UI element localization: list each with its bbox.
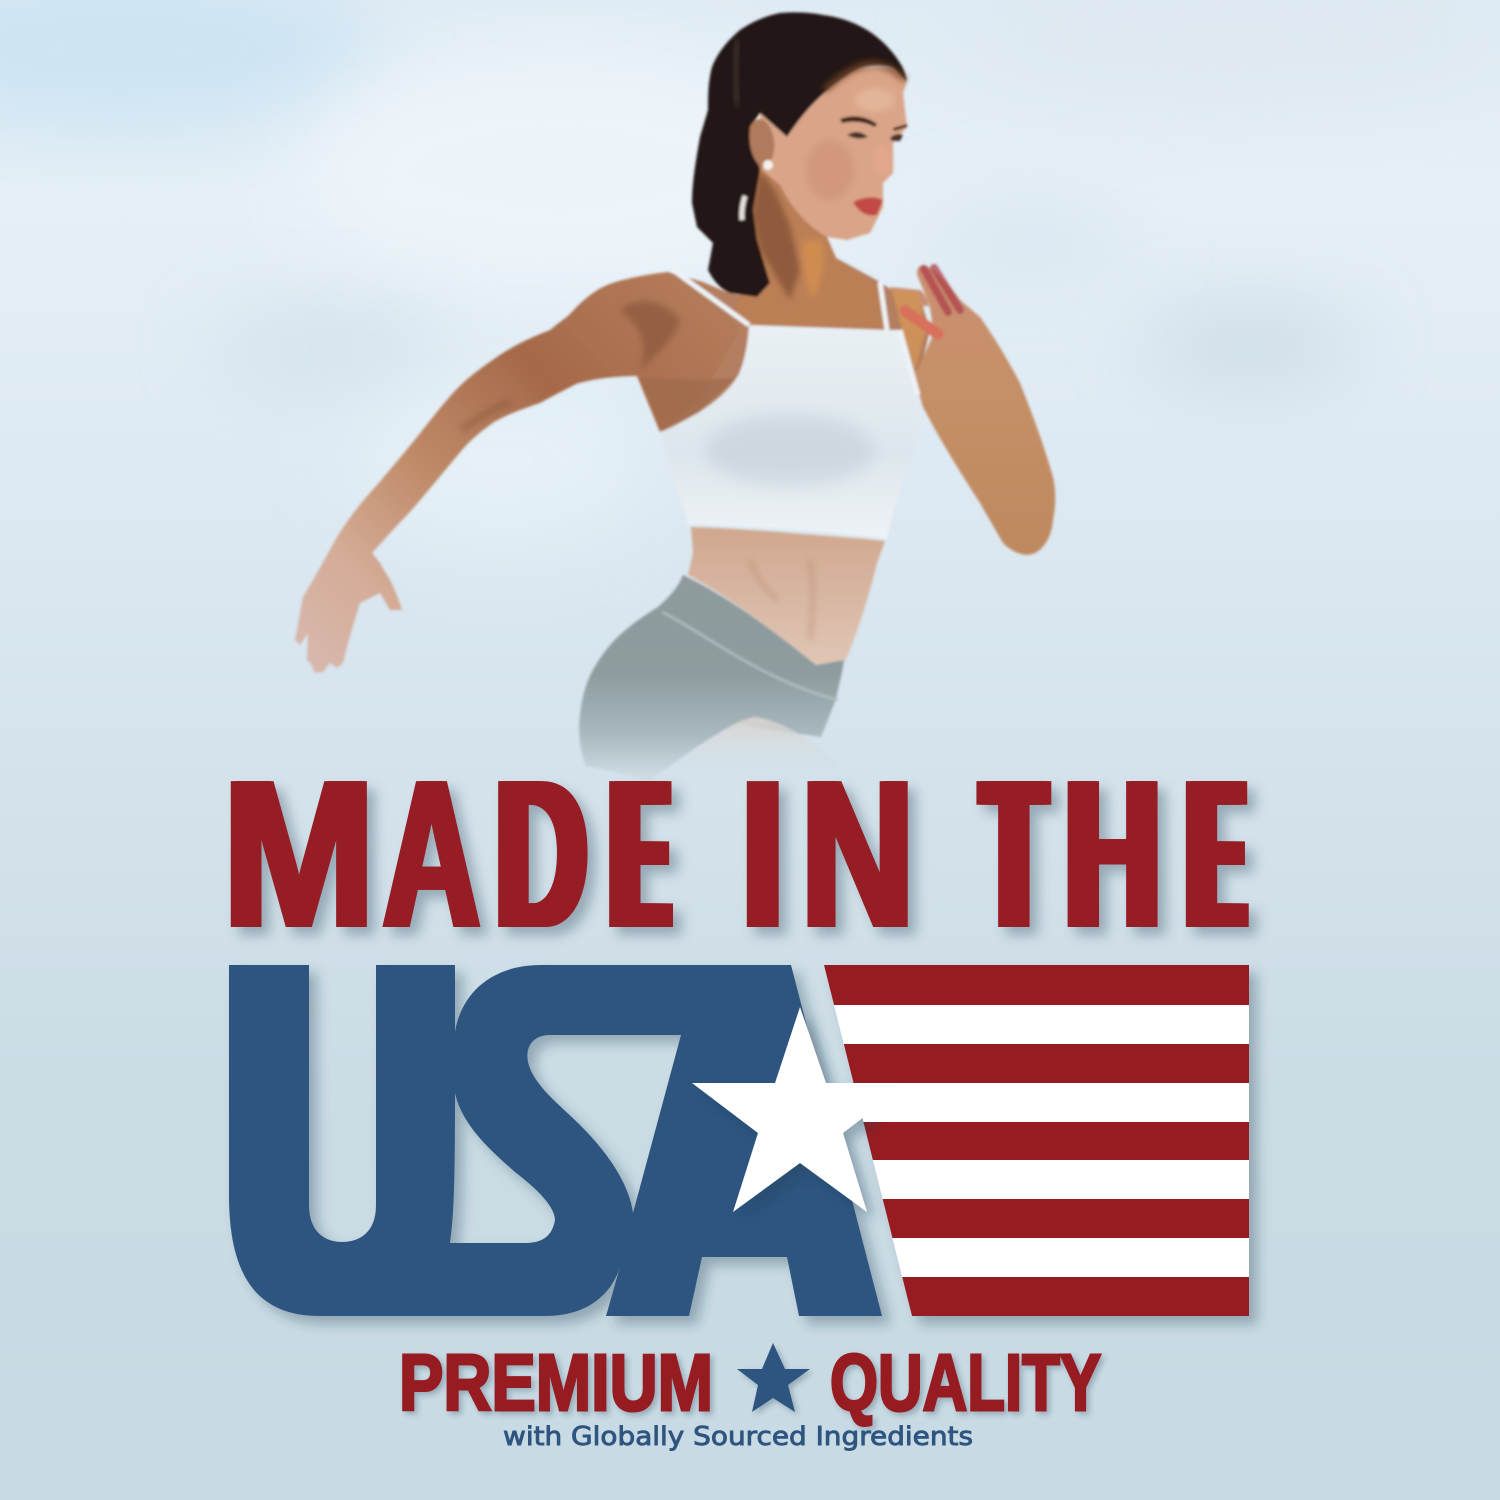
- thumb: [905, 311, 938, 334]
- forehead light: [855, 88, 895, 112]
- hair and ponytail: [692, 12, 907, 297]
- top shading: [705, 414, 875, 486]
- heading: MADE IN THE: M: [222, 734, 375, 972]
- PREMIUM: PREMIUM: [399, 1338, 713, 1427]
- heading: MADE IN THE: T: [984, 734, 1043, 972]
- forearm crease shading: [462, 402, 510, 430]
- viewer-left arm and hand: [295, 272, 740, 673]
- ear: [750, 119, 774, 168]
- heading: MADE IN THE: E: [614, 734, 666, 972]
- hair clip highlight: [742, 196, 745, 220]
- facial features: [750, 88, 907, 215]
- cheek shade: [806, 140, 854, 200]
- top straps: [673, 270, 918, 395]
- eyebrows: [840, 116, 907, 131]
- sports top: [660, 325, 920, 539]
- shoulder highlight: [892, 290, 926, 370]
- thigh fading into mist: [650, 717, 855, 785]
- fingers: [924, 268, 960, 312]
- heading: MADE IN THE: D: [496, 734, 587, 972]
- reddish hairline: [825, 64, 905, 90]
- face: [760, 68, 907, 240]
- USA logo: [229, 965, 1250, 1316]
- flag stripes: [820, 965, 1250, 1316]
- star: [692, 1007, 908, 1212]
- heading: MADE IN THE: E: [1191, 734, 1241, 972]
- shorts: [579, 575, 844, 780]
- neck shadow: [752, 170, 800, 300]
- back shading under arm: [640, 378, 735, 430]
- white stripe over star tip: [856, 1083, 935, 1122]
- heading: MADE IN THE: N: [801, 734, 914, 972]
- abdomen shading: [750, 560, 813, 640]
- abdomen: [688, 527, 885, 665]
- heading: MADE IN THE: [222, 734, 1263, 972]
- heading: MADE IN THE: A: [383, 734, 480, 972]
- eyes: [847, 132, 903, 141]
- QUALITY: QUALITY: [830, 1338, 1101, 1427]
- neck highlight: [802, 240, 824, 300]
- star separator: [737, 1343, 810, 1412]
- viewer-right arm and hand: [890, 265, 1055, 555]
- lips: [853, 197, 883, 215]
- subtext: ingredients: with Globally Sourced Ingredients: [503, 1422, 973, 1452]
- shorts waistband line: [662, 612, 838, 700]
- neck and chest: [735, 125, 887, 330]
- nose: [873, 144, 891, 176]
- hair streak: [735, 40, 738, 105]
- heading: MADE IN THE: H: [1065, 734, 1160, 972]
- earring: [763, 160, 773, 170]
- letters USA: [229, 965, 882, 1316]
- heading: MADE IN THE: I: [732, 734, 793, 972]
- tagline: premium quality: [399, 1338, 1101, 1427]
- torso skin behind top: [637, 250, 930, 440]
- arm muscle shading: [620, 301, 680, 370]
- photo: running woman: [295, 12, 1055, 785]
